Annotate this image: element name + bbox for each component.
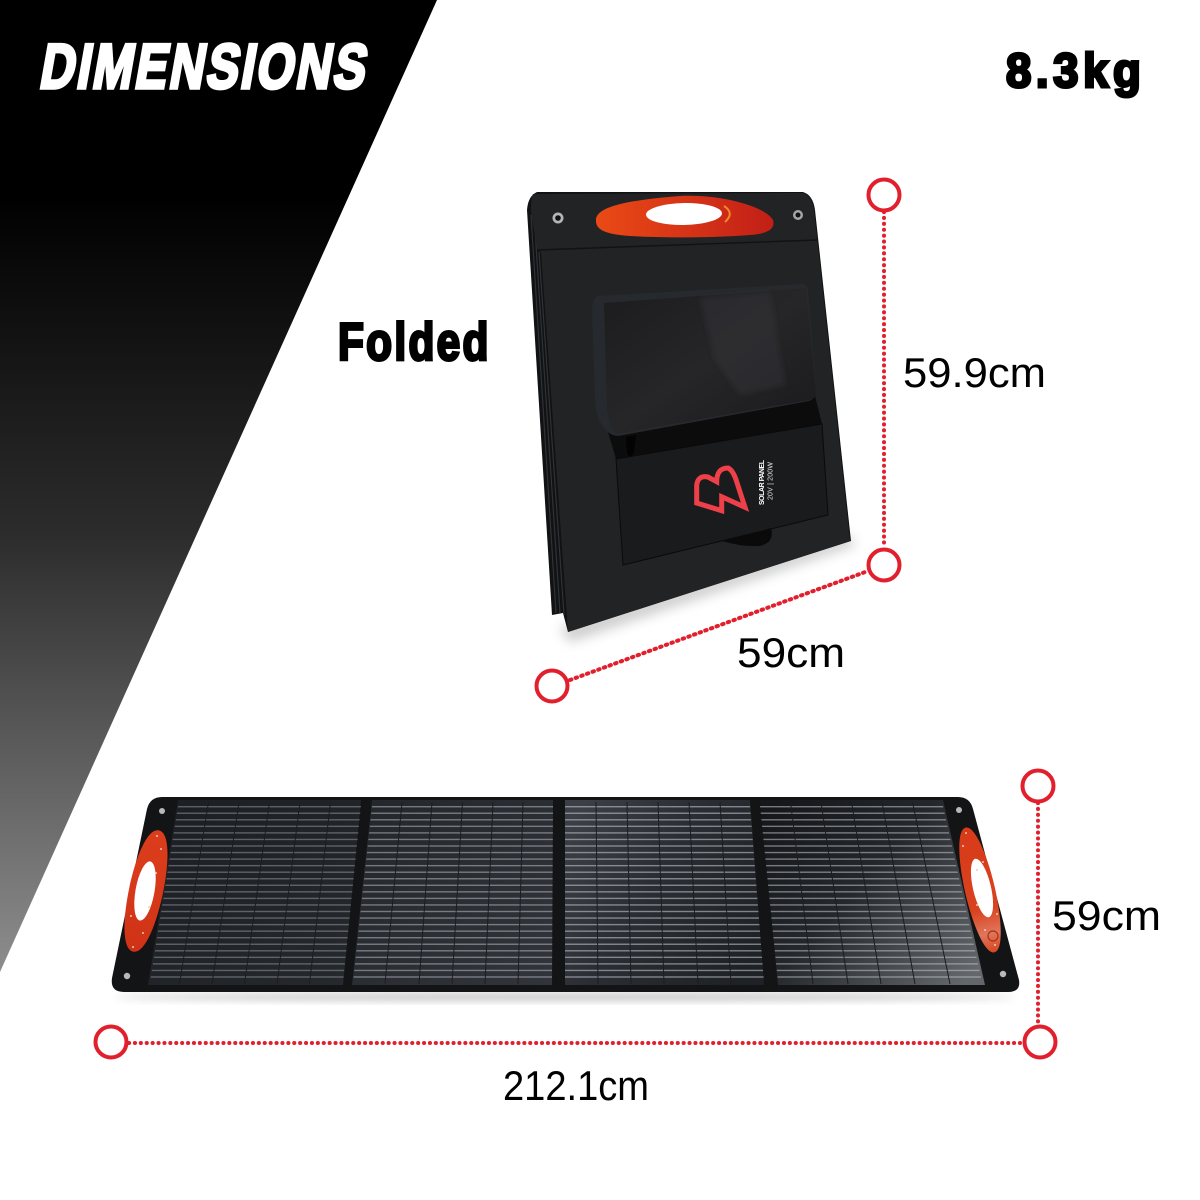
pouch wrinkle xyxy=(700,292,785,395)
folded solar panel case xyxy=(527,192,856,642)
grommet right xyxy=(793,210,803,220)
folded height measure xyxy=(868,180,900,580)
folded height label: 59.9cm xyxy=(903,349,1046,396)
carry strap xyxy=(722,528,772,546)
zipper pull xyxy=(626,435,636,459)
folded width measure xyxy=(536,571,868,702)
padded pouch xyxy=(592,284,816,436)
weight label: 8.3kg xyxy=(1006,44,1141,97)
product text: SOLAR PANEL xyxy=(759,459,766,505)
top handle xyxy=(596,196,773,237)
solar cells xyxy=(148,800,985,985)
unfolded width label: 212.1cm xyxy=(503,1062,649,1109)
title: DIMENSIONS xyxy=(36,31,373,101)
left handle xyxy=(116,827,176,955)
unfolded height label: 59cm xyxy=(1052,892,1161,939)
top strip seam xyxy=(537,240,817,250)
unfolded height measure xyxy=(1022,770,1056,1058)
corner screws xyxy=(124,807,1006,979)
unfolded solar panel xyxy=(112,797,1019,1001)
front face xyxy=(531,193,850,632)
product spec text: 20V | 200W xyxy=(768,462,774,500)
brand logo xyxy=(697,468,745,511)
grommet left xyxy=(552,212,564,224)
folded label: Folded xyxy=(338,314,488,372)
folded back layers xyxy=(531,215,564,615)
background gradient wedge xyxy=(0,0,437,972)
lower pocket with logo xyxy=(616,424,828,565)
unfolded width measure xyxy=(96,1026,1023,1058)
zip gap xyxy=(608,396,822,459)
right handle xyxy=(951,824,1009,956)
folded width label: 59cm xyxy=(737,629,845,676)
